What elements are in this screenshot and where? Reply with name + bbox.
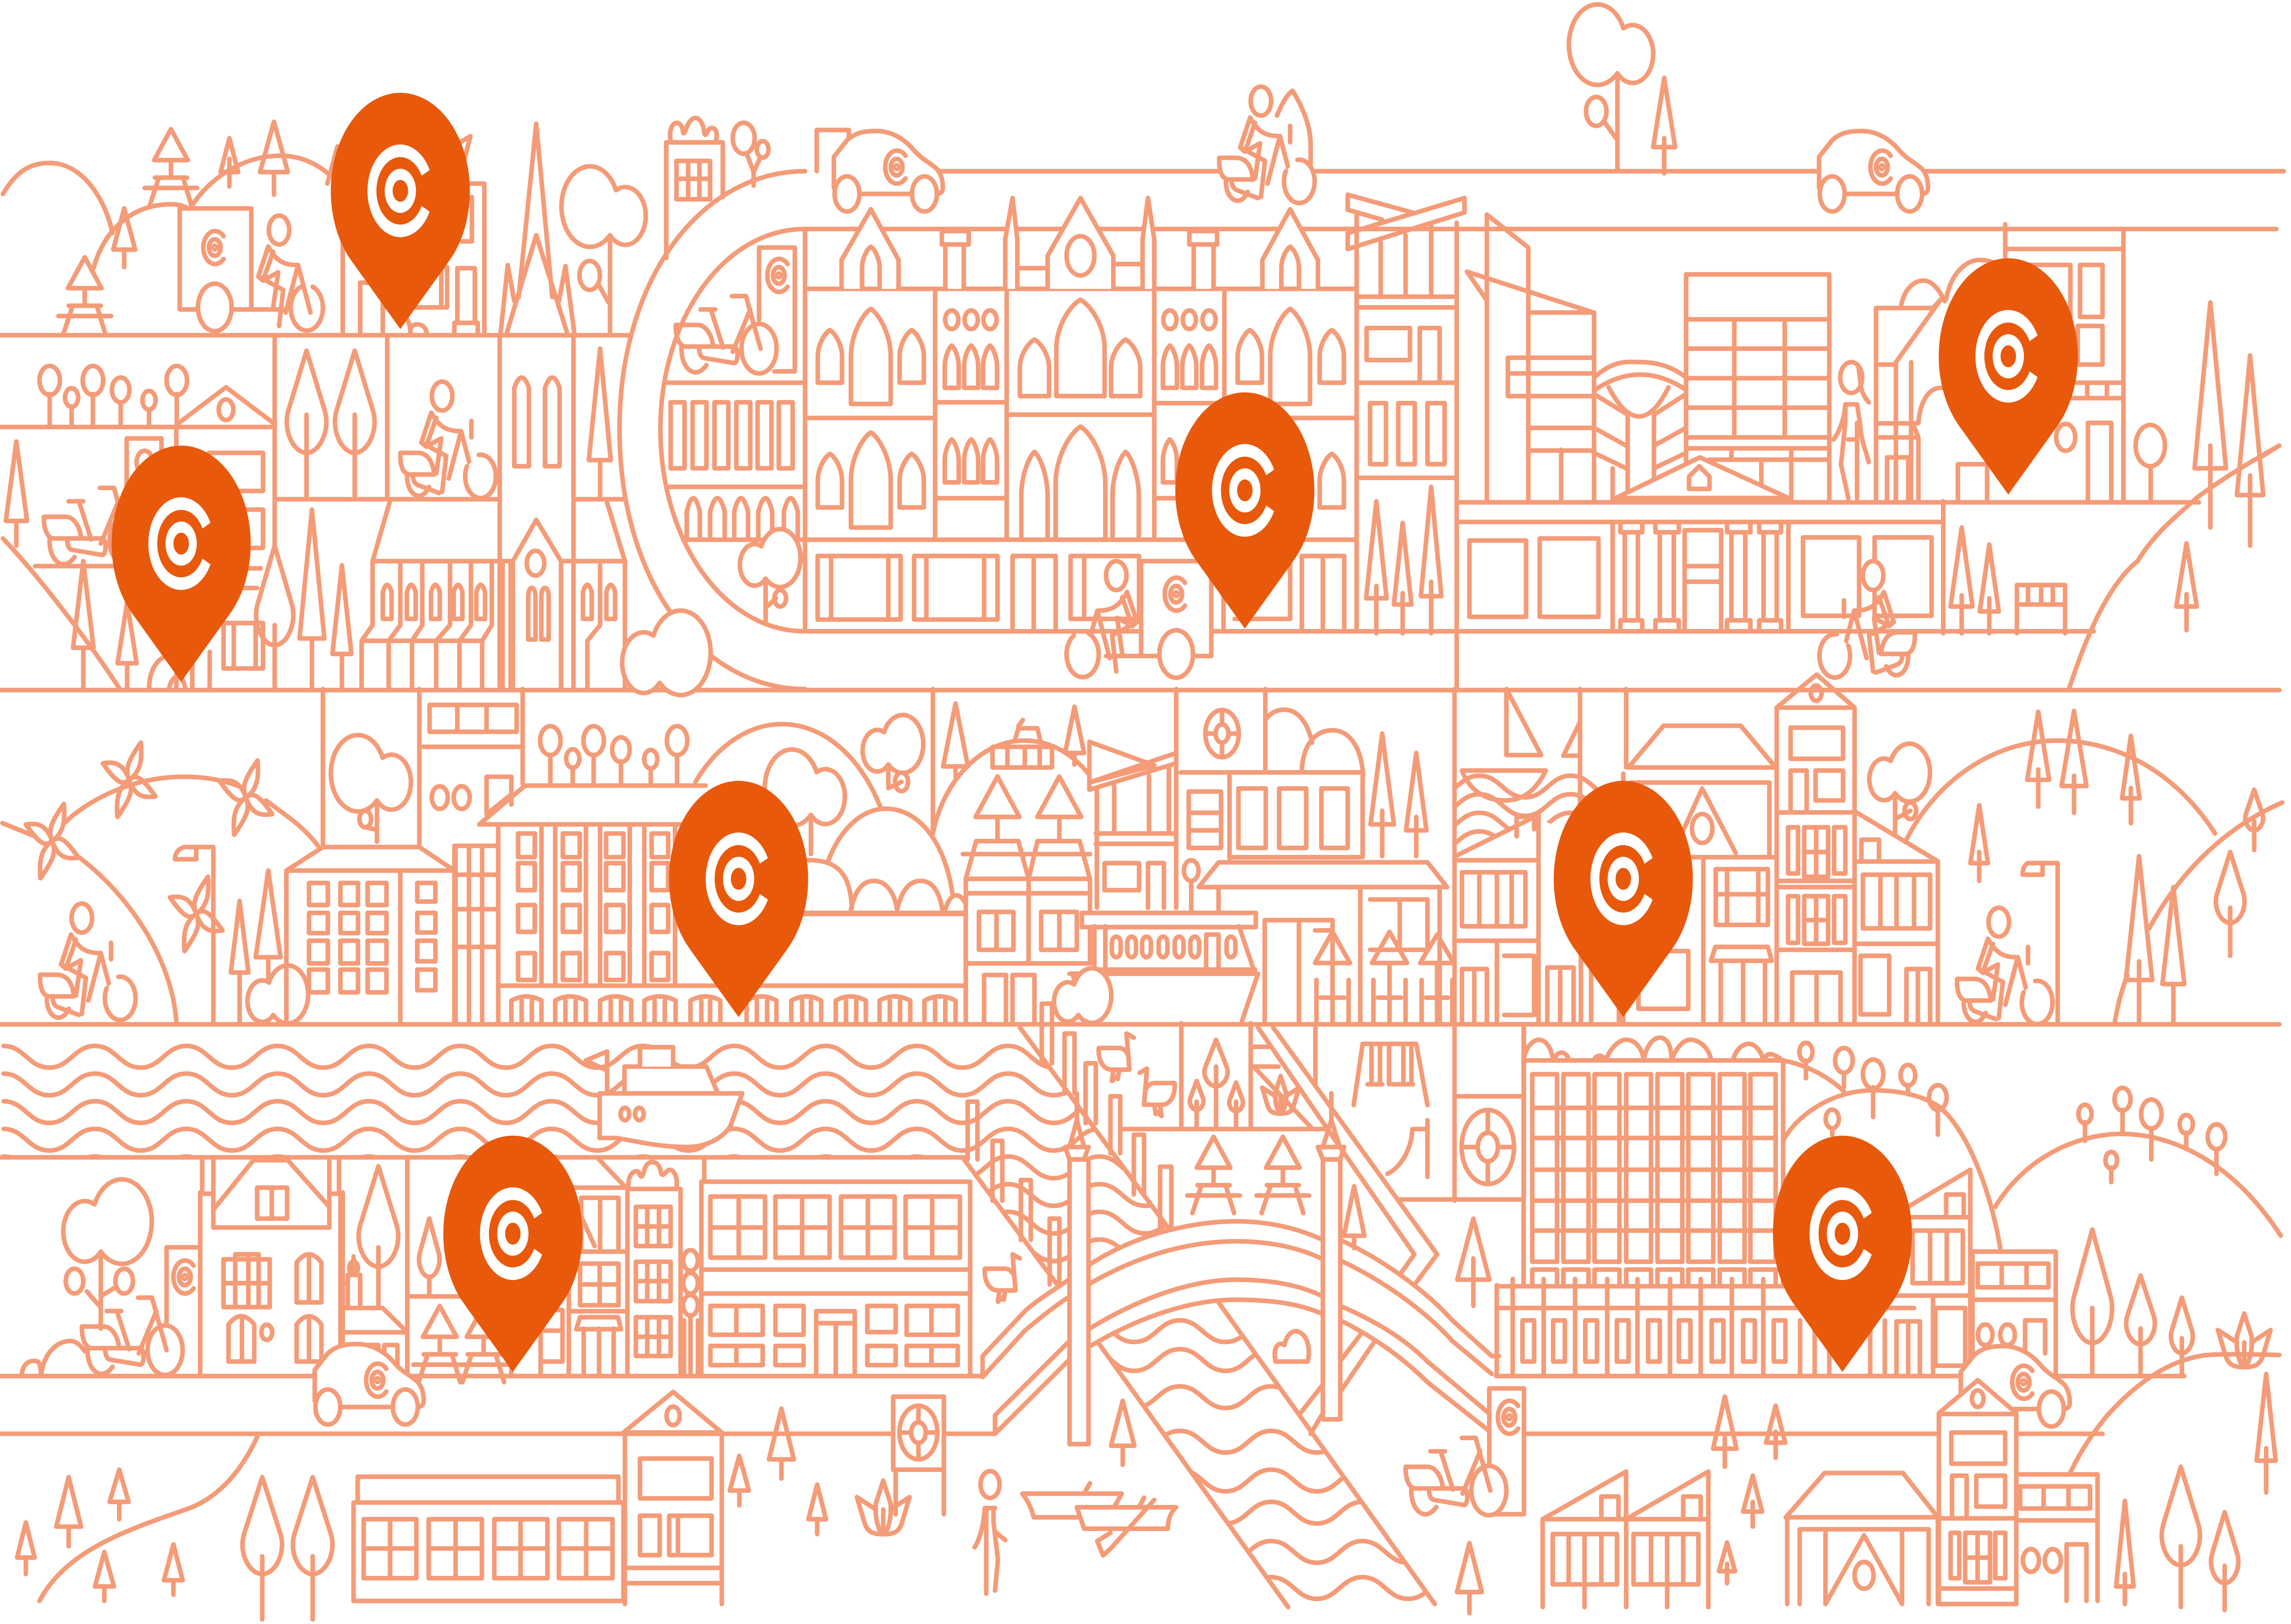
left slope and parked bicycle: [3, 488, 145, 689]
teardrop trees and lotus, lower right: [2072, 1230, 2270, 1376]
gables and spires: [842, 198, 1318, 289]
rider and basket, lower right of upper block: [1820, 561, 1915, 678]
teardrop trees: [256, 351, 374, 689]
corner building behind fourth pin: [1876, 224, 2165, 501]
cloud tree and rider, mid right: [1869, 744, 1930, 836]
sailboat and waves: [1452, 687, 1598, 1022]
street lamp right: [2022, 863, 2058, 1023]
car, lower left road: [315, 1344, 424, 1425]
tower house, bottom right: [1939, 1380, 2017, 1604]
bottom left curve and pines: [17, 1434, 258, 1601]
house behind second pin: [126, 337, 274, 689]
narrow tower house: [1777, 675, 1855, 1023]
row of terrace houses: [1457, 689, 1776, 1023]
column and bike panel, lower right of bridge: [1406, 1389, 1524, 1515]
river banks and pilings: [964, 1028, 1437, 1607]
car behind tower house, lower right: [1961, 1346, 2070, 1427]
pines and bush by the apartment: [231, 870, 308, 1023]
angled roof building: [1348, 195, 1464, 689]
delivery rider in box: [400, 382, 496, 498]
street lamp left: [175, 847, 214, 1023]
cargo bike with box on the street: [1067, 561, 1211, 678]
cloud tree with pine, top road: [1569, 5, 1675, 173]
house with chimneys, lower left: [200, 1157, 340, 1376]
road and street lines: [0, 171, 2284, 1434]
cloud tree inside the loop: [740, 529, 800, 624]
pines and sign along bottom road: [730, 1401, 1482, 1613]
lotus, bottom: [857, 1481, 910, 1534]
grid office tower: [1686, 274, 1829, 501]
town hall main facade: [805, 198, 1355, 631]
location pin 8: [1773, 1136, 1912, 1372]
location pin 6: [1554, 781, 1693, 1017]
pines in the park: [1344, 1186, 1490, 1306]
teardrop trees, mid right: [2216, 790, 2263, 956]
waterfront building and ferry terminal: [1069, 689, 1447, 1021]
upper river fence and planter boxes: [1122, 1023, 1325, 1129]
picnic area by pin seven: [408, 1219, 510, 1382]
curved canopy building: [1594, 362, 1686, 501]
rowing boats: [1022, 1483, 1176, 1555]
pilings in the water: [968, 1004, 1171, 1285]
buildings inside the loop: [666, 247, 804, 540]
standing person: [975, 1471, 1005, 1594]
bush-roofed tower, lower row: [627, 1162, 698, 1376]
domed building with towers: [933, 689, 1090, 1023]
civic hall facade: [1469, 501, 1943, 634]
annex with round windows, bottom right: [2017, 1475, 2098, 1601]
cloud tree on the tower block: [331, 735, 411, 842]
apartment building with tower: [286, 689, 523, 1023]
ferry boat on the river: [586, 1047, 742, 1147]
long hotel block: [455, 786, 965, 1023]
delivery rider, mid right: [1957, 908, 2053, 1024]
teardrop trees, bottom right: [2162, 1467, 2238, 1610]
arched bridge with towers: [982, 1094, 1499, 1444]
delivery rider, mid left: [40, 903, 136, 1020]
cargo bike with rider: [180, 208, 323, 331]
teardrop trees, bottom left: [242, 1477, 333, 1619]
hill with pinwheel flowers: [2, 743, 318, 1021]
picnic tables, upper left: [59, 129, 197, 334]
lower right hill: [2070, 1354, 2279, 1473]
modern office block: [1467, 214, 1594, 501]
long low building, bottom: [354, 1476, 624, 1601]
pines at right edge: [2195, 302, 2279, 546]
park hills with bushes: [696, 715, 965, 913]
street hall with awning: [362, 501, 499, 689]
hills with lollipop trees, lower right: [1782, 1043, 2281, 1248]
building with bush roof: [666, 118, 768, 258]
large hotel with rooftop bushes: [1497, 1028, 1914, 1376]
pediment of civic hall: [1616, 457, 1788, 498]
bush at end of the loop: [622, 611, 711, 695]
church front tower: [500, 503, 625, 689]
pines and shed by the hall: [1951, 527, 2197, 634]
car on top road, right: [1819, 131, 1928, 212]
pine trees, upper left: [6, 122, 288, 546]
ground floor windows: [817, 540, 1344, 631]
long waterfront building: [702, 1157, 970, 1376]
lifebuoy sign, bottom: [893, 1397, 944, 1514]
car at top left of the loop: [817, 130, 943, 212]
house with slanted roof, lower right: [1870, 1170, 2056, 1376]
pines, bottom right: [1713, 1374, 2276, 1604]
gabled house right of the tower: [1856, 812, 1938, 1023]
building behind first pin: [327, 136, 484, 334]
rider on top road with hill: [1219, 87, 1315, 203]
upper river waves: [4, 1046, 1191, 1261]
lollipop trees on hotel roof: [540, 726, 687, 784]
location pin 2: [112, 446, 251, 682]
swing set and slide: [1354, 1044, 1427, 1177]
picnic tables at the bridge: [1187, 1137, 1309, 1213]
parked bicycle in the loop: [676, 296, 777, 373]
location pin 1: [331, 93, 470, 329]
cloud tree with bike, lower left: [22, 1179, 200, 1376]
pines along the church: [73, 349, 611, 689]
lifebuoy panel: [1400, 1028, 1524, 1201]
hills with pines, mid right: [1905, 711, 2282, 1023]
lollipop trees row: [39, 366, 187, 446]
street lines around the teardrop trees: [274, 336, 625, 689]
gothic windows: [818, 247, 1344, 540]
lower river waves: [1111, 1318, 1426, 1601]
bush by the ferry terminal: [1054, 968, 1111, 1023]
location pin 7: [443, 1136, 582, 1372]
church with spires: [501, 124, 574, 332]
location pin 3: [1175, 392, 1315, 629]
location pin 5: [669, 781, 808, 1017]
tree and small house next to car: [343, 1157, 407, 1376]
location pin 4: [1939, 258, 2078, 494]
wide gabled house, bottom right: [1786, 1473, 1938, 1604]
woman walking: [1834, 362, 1869, 498]
twin houses, bottom right: [1543, 1471, 1708, 1607]
cafe with umbrella tables: [1265, 887, 1454, 1023]
gabled tower house, bottom: [624, 1392, 722, 1604]
houses behind pin seven: [511, 1159, 627, 1376]
church windows: [514, 377, 559, 466]
hills, upper left: [3, 156, 330, 268]
small cloud above lower river: [1275, 1331, 1309, 1362]
swans: [985, 1033, 1175, 1302]
cloud tree near the church: [561, 166, 646, 332]
